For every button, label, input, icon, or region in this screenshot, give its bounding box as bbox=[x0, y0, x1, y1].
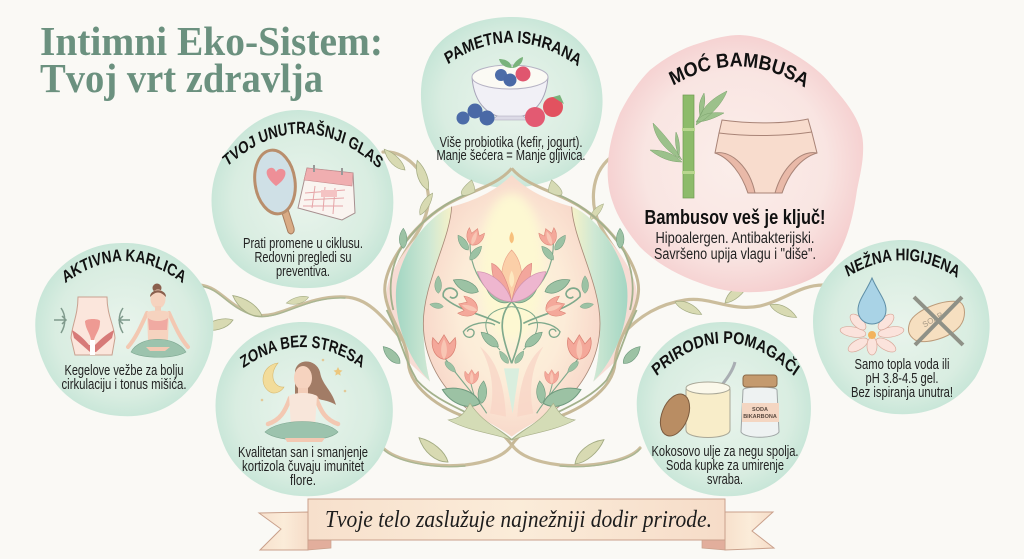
text: Pametna ishrana: Više probiotika (kefir, jogurt). bbox=[440, 135, 582, 151]
text: Nežna higijena: pH 3.8-4.5 gel. bbox=[866, 371, 938, 387]
subheading: Bambusov veš je ključ: Bambusov veš je ključ! bbox=[644, 207, 826, 229]
text: Prirodni pomagači: svraba. bbox=[707, 472, 743, 488]
text: Prirodni pomagači: Soda kupke za umirenje bbox=[666, 458, 784, 474]
text: Zona bez stresa: kortizola čuvaju imunitet bbox=[242, 459, 364, 475]
icon: meditating woman bbox=[265, 362, 338, 442]
icon: flower bbox=[839, 311, 905, 355]
panel: Tvoj unutrašnji glas bbox=[212, 110, 394, 288]
panel: Pametna ishrana bbox=[421, 17, 602, 187]
icon: baking soda jar bbox=[741, 375, 779, 437]
icon: coconut oil jar bbox=[655, 362, 735, 440]
icon: crossed-out soap: SOAP bbox=[921, 310, 945, 329]
panel: Moć bambusa bbox=[608, 35, 864, 292]
icon: moon and stars bbox=[261, 359, 346, 401]
text: Nežna higijena bbox=[851, 357, 953, 401]
text: Aktivna karlica: cirkulaciju i tonus mišića. bbox=[62, 377, 186, 393]
text: Tvoj unutrašnji glas: Redovni pregledi su bbox=[254, 250, 352, 266]
banner text: Tvoje telo zaslužuje najnežniji dodir prirode. bbox=[325, 507, 712, 533]
heading: Pametna ishrana: PAMETNA ISHRANA bbox=[444, 30, 580, 66]
panel: Nežna higijena bbox=[813, 240, 990, 414]
lotus flower bbox=[477, 232, 546, 302]
heading: Aktivna karlica: AKTIVNA KARLICA bbox=[64, 249, 184, 284]
text: Moć bambusa bbox=[654, 230, 816, 263]
vine leaves bbox=[199, 147, 799, 468]
text: Zona bez stresa bbox=[238, 445, 368, 489]
text: Moć bambusa: Hipoalergen. Antibakterijski. bbox=[656, 230, 814, 247]
icon: calendar bbox=[298, 165, 355, 220]
icon: woman in yoga pose bbox=[128, 284, 188, 357]
icon: crossed-out soap bbox=[908, 297, 964, 345]
text: Tvoj unutrašnji glas: Prati promene u ciklusu. bbox=[243, 236, 363, 252]
heading: Nežna higijena: NEŽNA HIGIJENA bbox=[844, 248, 958, 278]
text: Tvoj unutrašnji glas: preventiva. bbox=[276, 264, 330, 280]
central illustration: floral garden bbox=[380, 168, 643, 445]
text: Aktivna karlica bbox=[62, 363, 186, 393]
text: Pametna ishrana bbox=[436, 135, 586, 164]
icon: bamboo underwear bbox=[715, 119, 817, 193]
text: Moć bambusa: Savršeno upija vlagu i "diše". bbox=[654, 246, 816, 263]
icon: water drop bbox=[858, 278, 886, 324]
text: Nežna higijena: Samo topla voda ili bbox=[854, 357, 950, 373]
title: Intimni Eko-Sistem: bbox=[40, 18, 383, 64]
text: Pametna ishrana: Manje šećera = Manje gljivica. bbox=[436, 148, 586, 164]
text: Zona bez stresa: flore. bbox=[290, 473, 316, 489]
text: Zona bez stresa: Kvalitetan san i smanjenje bbox=[238, 445, 368, 461]
panel: Aktivna karlica bbox=[35, 243, 214, 416]
heading: Prirodni pomagači: PRIRODNI POMAGAČI bbox=[651, 331, 800, 376]
panel: Prirodni pomagači bbox=[636, 322, 811, 496]
icon: baking soda jar: BIKARBONA bbox=[743, 414, 777, 420]
icon: baking soda jar: SODA bbox=[752, 407, 768, 413]
heading: Tvoj unutrašnji glas: TVOJ UNUTRAŠNJI GLAS bbox=[222, 120, 383, 168]
icon: bamboo bbox=[650, 91, 727, 198]
icon: hand mirror bbox=[251, 148, 299, 234]
text: Tvoj unutrašnji glas bbox=[243, 236, 363, 280]
icon: pelvic diagram with arrows bbox=[54, 297, 130, 355]
banner bbox=[259, 499, 774, 550]
heading: Moć bambusa: MOĆ BAMBUSA bbox=[668, 52, 806, 88]
icon: yogurt bowl with berries bbox=[456, 57, 564, 127]
heading: Zona bez stresa: ZONA BEZ STRESA bbox=[240, 335, 363, 368]
text: Prirodni pomagači: Kokosovo ulje za negu spolja. bbox=[652, 444, 798, 460]
connecting vines bbox=[199, 147, 823, 468]
title: Tvoj vrt zdravlja bbox=[40, 55, 323, 101]
panel: Zona bez stresa bbox=[216, 322, 393, 496]
text: Nežna higijena: Bez ispiranja unutra! bbox=[851, 385, 953, 401]
text: Prirodni pomagači bbox=[652, 444, 798, 488]
title bbox=[40, 18, 383, 101]
text: Aktivna karlica: Kegelove vežbe za bolju bbox=[64, 363, 184, 379]
